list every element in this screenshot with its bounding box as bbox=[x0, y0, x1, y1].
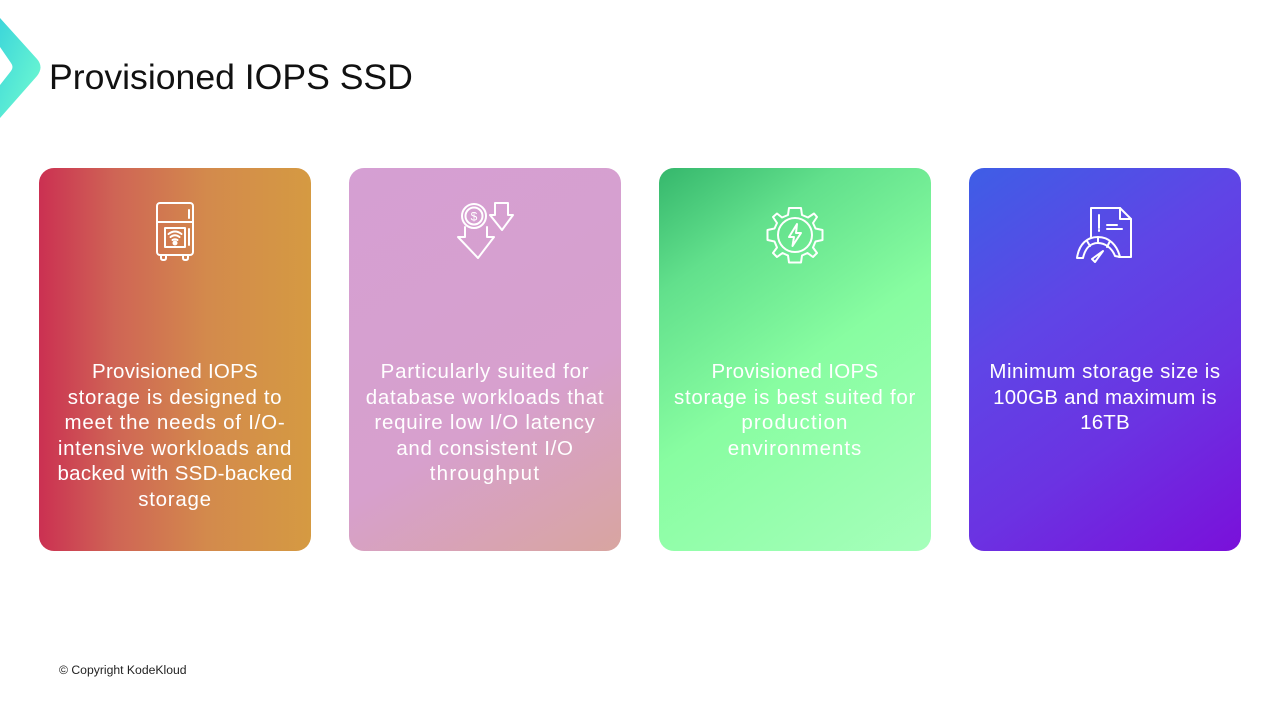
description text bbox=[58, 360, 292, 511]
description text: storage is best suited for bbox=[674, 386, 916, 409]
description text: environments bbox=[728, 437, 862, 460]
logo chevron bbox=[0, 18, 40, 118]
description text: Provisioned IOPS bbox=[711, 360, 879, 383]
icon: coin and down arrows: $ bbox=[471, 210, 478, 224]
panel: storage size limits bbox=[969, 168, 1241, 551]
description text: 100GB and maximum is bbox=[993, 386, 1217, 409]
description text bbox=[989, 360, 1221, 434]
description text bbox=[674, 360, 916, 460]
description text bbox=[366, 360, 604, 485]
icon: coin and down arrows bbox=[457, 202, 514, 259]
description text: intensive workloads and bbox=[58, 437, 292, 460]
description text: require low I/O latency bbox=[374, 411, 596, 434]
description text: Minimum storage size is bbox=[989, 360, 1221, 383]
description text: 16TB bbox=[1080, 411, 1130, 434]
description text: throughput bbox=[430, 462, 540, 485]
copyright footer: © Copyright KodeKloud bbox=[59, 663, 187, 677]
panel: production environments bbox=[659, 168, 931, 551]
description text: production bbox=[741, 411, 849, 434]
description text: Provisioned IOPS bbox=[92, 360, 258, 383]
description text: database workloads that bbox=[366, 386, 604, 409]
icon: gear with lightning bolt bbox=[766, 207, 824, 264]
title: Provisioned IOPS SSD bbox=[49, 57, 413, 97]
description text: backed with SSD-backed bbox=[58, 462, 292, 485]
description text: meet the needs of I/O- bbox=[65, 411, 285, 434]
icon: document with gauge bbox=[1076, 207, 1132, 263]
icon: smart fridge with wifi bbox=[156, 202, 194, 261]
description text: and consistent I/O bbox=[396, 437, 574, 460]
description text: storage bbox=[138, 488, 212, 511]
panel: database workloads bbox=[349, 168, 621, 551]
description text: Particularly suited for bbox=[381, 360, 589, 383]
description text: storage is designed to bbox=[68, 386, 282, 409]
panel: designed for I/O-intensive workloads bbox=[39, 168, 311, 551]
